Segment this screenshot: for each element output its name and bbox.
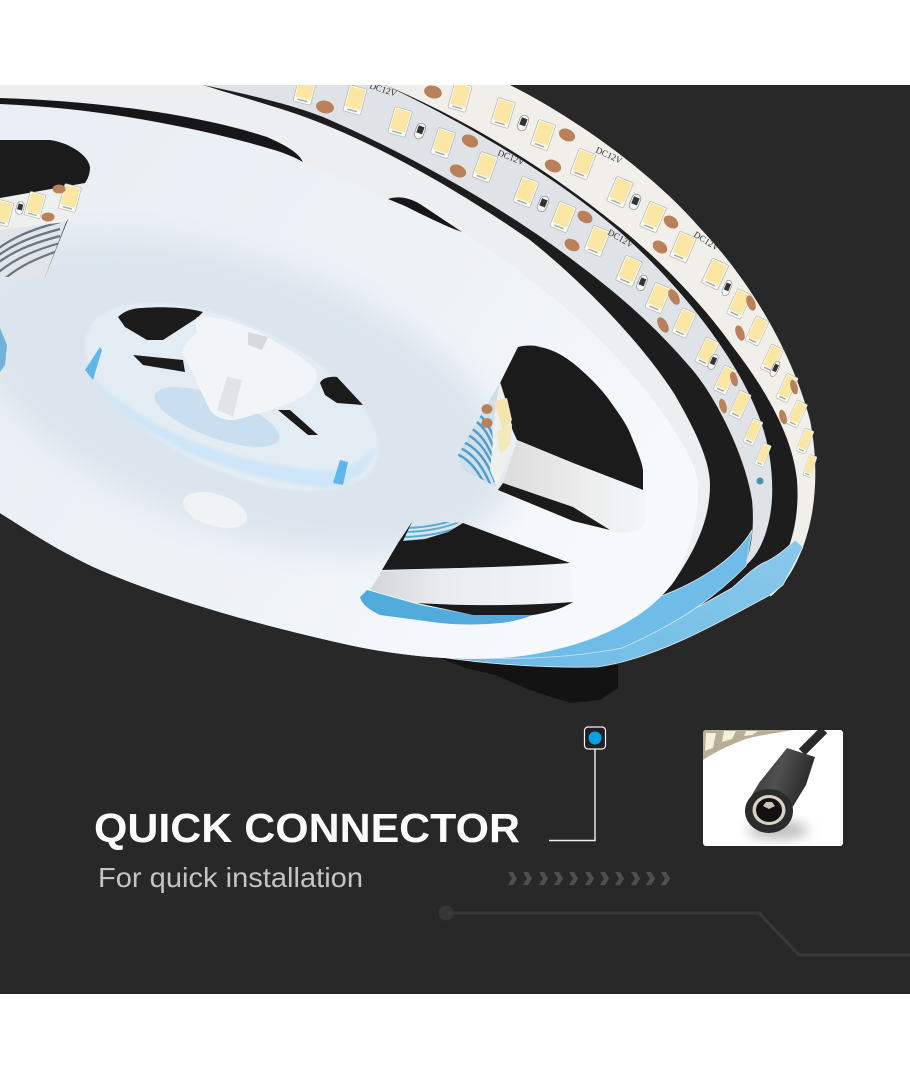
marker: blue dot <box>584 727 606 749</box>
lower rib <box>370 564 574 605</box>
second crescent slot <box>388 197 462 232</box>
inset connector barrel <box>746 748 815 808</box>
outer blue adhesive tape <box>440 540 803 667</box>
hub slit right <box>278 410 318 435</box>
right main window <box>446 346 647 533</box>
lower coil <box>403 522 463 541</box>
dark shadow behind strips <box>203 85 815 620</box>
lower window <box>382 517 570 570</box>
narrow slit under spoke <box>498 483 610 530</box>
inset LEDs <box>705 731 758 751</box>
hub upper-left hole <box>118 307 203 340</box>
inner LED strip: DC12V <box>496 148 526 168</box>
hub slit left <box>133 355 185 372</box>
chevron row <box>508 872 670 885</box>
reel <box>0 85 710 659</box>
coil seen through window <box>458 382 500 487</box>
outer LED strip <box>385 82 817 597</box>
outer LED strip: DC12V <box>594 145 624 166</box>
inner LED strip <box>203 75 772 566</box>
reel front plate <box>0 104 698 659</box>
reel face shading <box>0 171 554 619</box>
strip seen through window <box>482 382 514 487</box>
hub blue tab left <box>85 347 102 380</box>
inner LED strip: DC12V <box>606 227 636 250</box>
reel push button <box>179 485 251 535</box>
subtitle: For quick installation <box>98 862 363 893</box>
inner blue adhesive tape <box>440 530 752 658</box>
left strip LEDs <box>0 183 85 230</box>
title: QUICK CONNECTOR <box>94 805 520 851</box>
hub inner blue ellipse <box>148 375 286 459</box>
inset strip <box>703 730 794 760</box>
inset cable <box>802 730 824 752</box>
connector plug under reel <box>440 658 618 703</box>
hub blue glow <box>92 375 377 488</box>
left window <box>0 140 90 281</box>
inset connector socket <box>756 798 782 822</box>
inset connector ring <box>752 795 786 825</box>
right spoke <box>503 440 647 533</box>
reel back plate <box>0 85 710 659</box>
dark sliver below rib <box>417 602 573 615</box>
central hub <box>58 264 406 530</box>
hub right hole <box>320 377 363 405</box>
circuit line decoration <box>438 906 910 955</box>
hub spindle <box>182 317 317 420</box>
outer LED strip: DC12V <box>692 229 721 253</box>
inset connector pin <box>763 802 775 809</box>
inset photo of connector <box>703 730 843 846</box>
hub recess <box>58 264 406 530</box>
blue tape through lower slot <box>360 590 533 624</box>
leader line <box>549 749 595 840</box>
spindle grey tab top <box>248 332 268 350</box>
inset connector face <box>745 789 793 833</box>
top crescent slot <box>0 98 303 162</box>
inner LED strip: DC12V <box>368 80 399 99</box>
hub blue tab right <box>333 460 348 485</box>
spindle grey tab bottom <box>217 377 242 417</box>
left strip coil <box>0 221 67 277</box>
inset shadow <box>748 821 808 839</box>
left edge coil fragment <box>0 328 7 372</box>
